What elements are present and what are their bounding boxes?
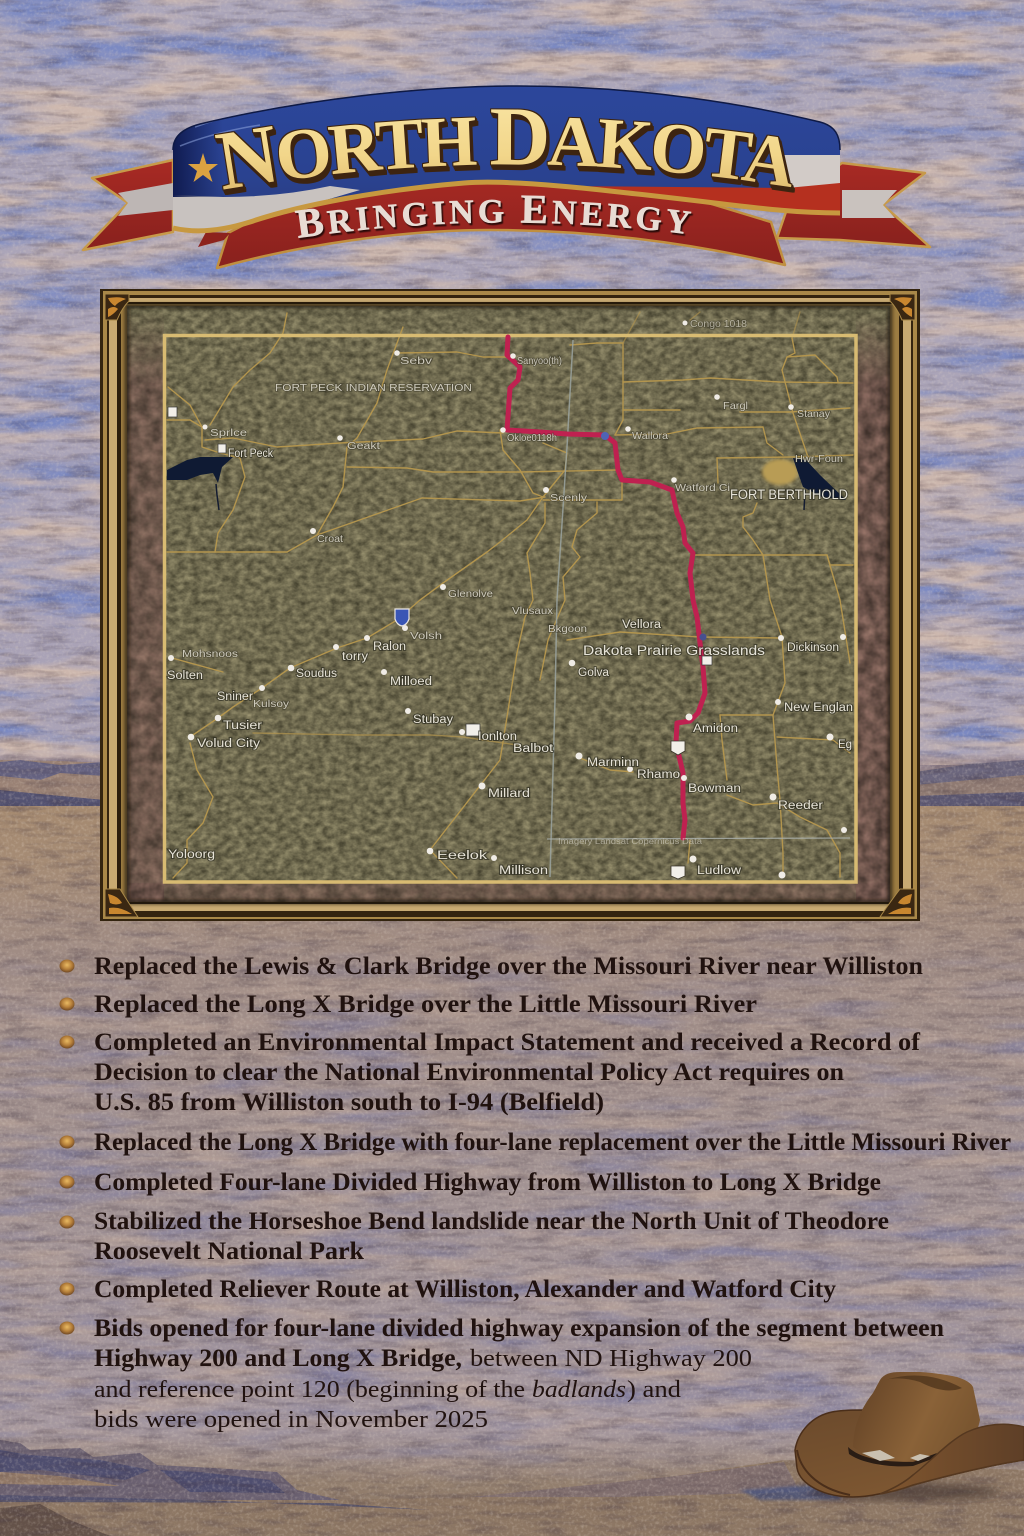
map labels: Okloe0118h [507, 432, 557, 444]
map labels: Dickinson [787, 642, 839, 654]
inner gold border [164, 336, 856, 882]
frame [100, 289, 920, 921]
map labels: Bkgoon [548, 623, 587, 635]
map labels: Solten [167, 670, 203, 682]
item: Environmental Impact Statement: Decision to clear the National Environmental Policy Act requires on [94, 1059, 844, 1086]
item: bids opened: bids were opened in November 2025 [94, 1407, 488, 1433]
map labels: Kulsoy [253, 698, 290, 710]
map labels: Croat [317, 533, 343, 545]
ribbon outline [173, 86, 840, 150]
corner ornaments [105, 294, 915, 917]
map labels: Balbot [513, 743, 554, 755]
map labels: FORT BERTHHOLD [730, 487, 848, 502]
map labels: Amidon [693, 723, 738, 735]
map labels: Vellora [622, 619, 662, 631]
map labels: Yoloorg [168, 849, 215, 861]
map labels: Scenly [550, 492, 588, 504]
map labels: Sniner [217, 691, 253, 703]
item: Lewis and Clark Bridge: Replaced the Lewis & Clark Bridge over the Missouri River near Williston [94, 953, 923, 980]
item: bids opened: Highway 200 and Long X Bridge, [94, 1345, 462, 1372]
map labels: Volsh [410, 630, 442, 642]
highway shields [168, 407, 712, 879]
banner left tail [83, 160, 173, 250]
upper horizon hills [0, 760, 1024, 806]
item: bids opened: badlands [532, 1377, 626, 1403]
item: bids opened: between ND Highway 200 [470, 1346, 752, 1372]
item: bids opened: Bids opened for four-lane divided highway expansion of the segment between [94, 1315, 944, 1342]
map labels: Ralon [373, 641, 406, 653]
item: Environmental Impact Statement: Completed an Environmental Impact Statement and received a Record of [94, 1029, 921, 1056]
item: bids opened: ) and [627, 1377, 681, 1403]
map labels: Volud City [197, 738, 260, 750]
map labels: Congo 1018 [690, 318, 747, 330]
map labels: Golva [578, 667, 610, 679]
map labels: Geakt [347, 440, 380, 452]
item: Environmental Impact Statement: U.S. 85 from Williston south to I-94 (Belfield) [94, 1089, 604, 1116]
map labels: Watford Ci [675, 482, 730, 494]
framed map [100, 289, 920, 921]
map labels [167, 318, 853, 877]
map labels: Sprlce [210, 427, 247, 439]
map labels: Fargl [723, 400, 748, 412]
subtitle text: BRINGING ENERGY [294, 195, 694, 241]
map labels: Vlusaux [512, 605, 554, 617]
map labels: torry [342, 651, 368, 663]
item: bids opened: and reference point 120 (beginning of the [94, 1377, 525, 1403]
map labels: Soudus [296, 668, 337, 680]
map labels: Milloed [390, 676, 432, 688]
bullet list [60, 953, 1011, 1433]
bullet markers [60, 960, 74, 1334]
map labels: Stanay [797, 408, 831, 420]
item: four-lane replacement: Replaced the Long X Bridge with four-lane replacement over the Little Missouri River [94, 1129, 1011, 1156]
map labels: Eg [838, 739, 852, 751]
road network [167, 312, 853, 878]
map labels: Sebv [400, 355, 433, 367]
map labels: Hwr-Foun [795, 453, 843, 465]
map labels: Marminn [587, 757, 639, 769]
map labels: Ionlton [478, 731, 517, 743]
map labels: New Englan [784, 702, 853, 714]
state border lines [547, 340, 850, 877]
item: Horseshoe Bend landslide [94, 1208, 889, 1265]
map mat [127, 306, 890, 902]
map labels: Sanyoo(th) [517, 355, 562, 367]
gold edge [173, 182, 840, 231]
title text: NORTH DAKOTA [214, 108, 795, 195]
item: Long X Bridge: Replaced the Long X Bridge over the Little Missouri River [94, 991, 757, 1018]
main ribbon [173, 86, 840, 228]
map labels: Glenolve [448, 588, 493, 600]
map labels: Dakota Prairie Grasslands [583, 643, 765, 658]
map labels: FORT PECK INDIAN RESERVATION [275, 382, 472, 394]
banner right tail [777, 163, 930, 247]
town markers [168, 320, 847, 878]
map labels: Wallora [632, 430, 668, 442]
item: Horseshoe Bend landslide: Roosevelt National Park [94, 1238, 364, 1265]
lower red ribbon [198, 170, 785, 268]
map labels: Tusier [223, 720, 262, 732]
lakes [167, 457, 846, 510]
map labels: Stubay [413, 714, 453, 726]
item: four-lane divided highway: Completed Four-lane Divided Highway from Williston to Long X Bridge [94, 1169, 881, 1196]
item: Environmental Impact Statement [94, 1029, 921, 1116]
map labels: Imagery Landsat Copernicus Data [558, 837, 703, 846]
map labels: Mohsnoos [182, 648, 238, 660]
item: reliever route: Completed Reliever Route at Williston, Alexander and Watford City [94, 1276, 837, 1303]
map labels: Reeder [778, 800, 823, 812]
map labels: Ludlow [697, 865, 742, 877]
map labels: Eeelok [437, 850, 487, 862]
map labels: Rhamo [637, 769, 680, 781]
map labels: Millard [488, 788, 530, 800]
title banner [82, 85, 932, 270]
item: bids opened [94, 1315, 944, 1433]
map labels: Millison [499, 865, 548, 877]
icon: star [188, 153, 218, 182]
map labels: Bowman [688, 783, 741, 795]
item: Horseshoe Bend landslide: Stabilized the Horseshoe Bend landslide near the North Unit of Theodore [94, 1208, 889, 1235]
icon: cowboy hat [795, 1372, 1024, 1501]
lower hills and ground [0, 1440, 1024, 1536]
red highway route [507, 337, 705, 838]
map labels: Fort Peck [228, 448, 273, 460]
